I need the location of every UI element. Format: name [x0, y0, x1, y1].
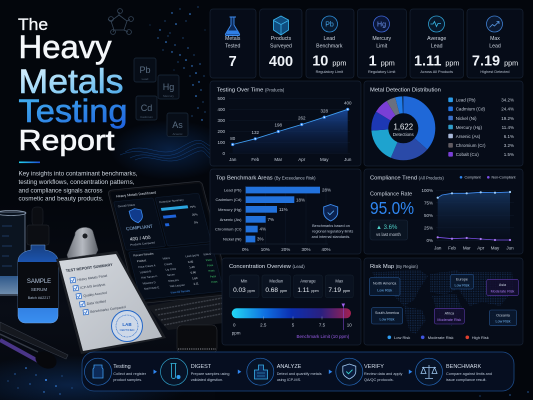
- donut chart: [380, 105, 427, 152]
- recent results table: 1.40: [189, 265, 195, 269]
- note: regional regulatory limits: [312, 230, 353, 234]
- arrow: [409, 370, 412, 374]
- bar chart: 7%: [268, 217, 274, 222]
- legend: [460, 176, 515, 180]
- periodic tiles: [134, 58, 188, 136]
- concentration scale: ppm: [232, 330, 241, 335]
- tweezers and brush: [0, 322, 68, 372]
- region: north america: Low Risk: [377, 288, 392, 292]
- icon: pulse: [428, 16, 444, 32]
- overall status card: [114, 198, 166, 250]
- legend: Arsenic (As): [456, 134, 481, 139]
- stat: median: 0.68 ppm: [265, 287, 287, 294]
- stars: [8, 367, 529, 396]
- checklist: Quality Assured: [83, 291, 107, 298]
- tile: Hg: Mercury: [163, 94, 174, 98]
- concentration scale: 5: [292, 322, 295, 327]
- step: verify: VERIFY: [364, 364, 384, 370]
- concentration scale: 7.5: [319, 322, 326, 327]
- region: north america: North America: [373, 282, 397, 286]
- legend: 24.4%: [501, 106, 514, 112]
- title: Metals: [18, 63, 123, 101]
- checklist: ICP-MS Analysis: [80, 282, 106, 290]
- tile: Hg: [158, 75, 179, 99]
- step: benchmark: issue compliance result.: [446, 378, 487, 382]
- tablet dashboard: [108, 181, 231, 304]
- icon: trend: [486, 16, 502, 32]
- bar chart: 30%: [301, 247, 311, 252]
- stat card: lead benchmark: Lead: [324, 36, 335, 42]
- bar chart: Chromium (Cr): [215, 227, 242, 232]
- stat: average: 1.11 ppm: [297, 287, 319, 294]
- stat: max: 7.19 ppm: [328, 287, 350, 294]
- jar: [177, 325, 217, 353]
- dashboard heading: Heavy Metals Dashboard: [116, 191, 157, 199]
- detection summary card: 20%: [192, 212, 199, 217]
- stat card: lead benchmark: Benchmark: [316, 44, 343, 50]
- tile: As: As: [172, 120, 183, 130]
- recent results table: Nail Lacquer: [169, 283, 185, 288]
- checklist: Benchmarks Compared: [90, 305, 126, 314]
- serum bottle: Batch #A2217: [28, 296, 50, 300]
- title: Testing: [18, 93, 128, 129]
- bar chart: 20%: [281, 247, 290, 252]
- stat card: products surveyed: [260, 9, 302, 78]
- tile: Hg: Hg: [163, 82, 174, 92]
- legend: Lead (Pb): [456, 98, 476, 102]
- checklist: [70, 273, 126, 315]
- recent results table: Mascara D: [142, 280, 156, 285]
- concentration scale: 10: [347, 322, 352, 327]
- recent results table: Lead (ppm): [185, 253, 200, 258]
- line chart: Apr: [298, 157, 306, 162]
- line chart: [217, 96, 352, 162]
- heading: Compliance Trend (All Products): [370, 175, 444, 181]
- line chart: 80: [230, 136, 236, 141]
- region: asia: [487, 279, 518, 296]
- legend: Moderate Risk: [428, 335, 453, 340]
- trend chart: Jan: [434, 245, 442, 250]
- step: analyze: Detect and quantify metals: [277, 372, 322, 376]
- trend chart: Jun: [506, 245, 514, 250]
- step: digest: DIGEST: [191, 364, 212, 370]
- panel: top benchmark areas: [210, 169, 361, 254]
- intro text: cosmetic and beauty products.: [18, 196, 104, 202]
- region: africa: Africa: [445, 312, 455, 316]
- tile: Pb: Pb: [139, 65, 151, 75]
- region: europe: Europe: [456, 278, 468, 282]
- trend chart: [421, 188, 514, 250]
- stat: max: [325, 275, 353, 298]
- concentration scale: Benchmark Limit (10 ppm): [297, 334, 350, 339]
- recent results table: 1.60: [192, 276, 198, 280]
- particle swirl: [150, 6, 206, 121]
- legend: 3.2%: [504, 143, 514, 148]
- panel: compliance trend: [364, 169, 523, 254]
- icon: Pb: Pb: [325, 22, 334, 28]
- stat card: metals tested: 7: [229, 54, 237, 70]
- stat card: max lead: Lead: [489, 44, 501, 50]
- step: benchmark: Compare against limits and: [446, 372, 492, 376]
- world map: [372, 270, 514, 334]
- checklist: Heavy Metals Panel: [77, 274, 108, 282]
- stat card: mercury limit: Mercury: [372, 36, 391, 42]
- legend: Nickel (Ni): [456, 116, 477, 121]
- tile: Cd: [136, 96, 157, 120]
- detection summary card: Detection Summary: [159, 198, 185, 204]
- title: The: [18, 15, 48, 34]
- trend chart: 75%: [424, 200, 433, 205]
- stat card: metals tested: [210, 9, 256, 78]
- concentration scale: 2.5: [260, 322, 267, 327]
- legend: Low Risk: [394, 335, 410, 340]
- stat card: average lead: Lead: [431, 44, 443, 50]
- heading: Concentration Overview (Lead): [229, 264, 305, 270]
- legend: 34.2%: [501, 98, 514, 102]
- trend chart: Feb: [448, 245, 456, 250]
- trend chart: Apr: [477, 245, 485, 250]
- recent results table: Recent Results: [133, 252, 155, 257]
- stat card: average lead: Across All Products: [420, 70, 453, 74]
- stat card: max lead: [467, 9, 523, 78]
- region: asia: Moderate Risk: [491, 290, 515, 294]
- clipboard: [56, 227, 166, 354]
- region: south america: [371, 308, 403, 324]
- stat card: mercury limit: Regulatory Limit: [368, 70, 396, 74]
- line chart: 132: [252, 130, 260, 135]
- region: europe: [451, 274, 473, 289]
- panel: testing over time: [210, 81, 361, 166]
- stat: min: 0.03 ppm: [233, 287, 255, 294]
- recent results table: 0.90: [190, 270, 197, 275]
- stat card: mercury limit: [358, 9, 406, 78]
- tile: Pb: [134, 58, 156, 82]
- line chart: 0: [222, 151, 225, 156]
- line chart: Feb: [251, 157, 260, 162]
- recent results table: [128, 244, 224, 300]
- stat card: products surveyed: 400: [269, 54, 293, 70]
- recent results table: Serum: [166, 272, 176, 277]
- region: oceania: Oceania: [496, 314, 511, 318]
- region: north america: [369, 278, 400, 296]
- line chart: 198: [275, 122, 283, 128]
- stat card: max lead: Max: [490, 36, 500, 42]
- heading: Testing Over Time (Products): [217, 87, 285, 93]
- bar chart: 4%: [260, 227, 266, 232]
- stat card: lead benchmark: 10 ppm: [312, 54, 346, 70]
- bar chart: Arsenic (As): [220, 217, 242, 222]
- serum bottle: SERUM: [31, 287, 47, 292]
- stat card: average lead: Average: [427, 36, 446, 42]
- icon: Hg: Hg: [377, 22, 386, 28]
- panel: concentration overview: [222, 258, 361, 345]
- bar chart: Lead (Pb): [224, 188, 242, 192]
- stat: average: [294, 275, 322, 298]
- legend: Mercury (Hg): [456, 125, 482, 130]
- region: oceania: Low Risk: [496, 320, 511, 324]
- recent results table: Pass: [205, 258, 213, 262]
- intro text: testing workflows, concentration patterns,: [18, 179, 135, 186]
- concentration scale: [232, 304, 352, 339]
- bar chart: 10%: [261, 247, 270, 252]
- intro text: and compliance signals across: [18, 188, 103, 194]
- stat card: products surveyed: Products: [271, 36, 292, 42]
- line chart: 500: [217, 96, 225, 101]
- legend: 11.4%: [502, 125, 514, 130]
- overall status card: 400 / 400: [129, 235, 152, 243]
- report heading: TEST REPORT SUMMARY: [66, 263, 113, 273]
- step: digest: [160, 358, 230, 385]
- trend chart: 100%: [421, 188, 433, 193]
- donut chart: 1,622: [394, 122, 413, 132]
- legend: High Risk: [472, 335, 489, 340]
- stat card: max lead: 7.19 ppm: [472, 54, 518, 70]
- bar chart: 40%: [321, 247, 331, 252]
- line chart: 100: [217, 140, 225, 145]
- trend chart: 0%: [426, 238, 433, 243]
- stamp: CERTIFIED: [120, 328, 134, 332]
- heading: Top Benchmark Areas (By Exceedance Risk): [216, 175, 316, 181]
- stat card: mercury limit: 1 ppm: [369, 54, 395, 70]
- legend: [448, 98, 514, 157]
- bar chart: 11%: [279, 207, 288, 212]
- recent results table: View All Results: [170, 289, 191, 295]
- stat card: max lead: Highest Detected: [480, 70, 510, 74]
- overall status card: Products Compared: [130, 240, 156, 247]
- trend chart: May: [491, 245, 500, 250]
- arrow: [329, 370, 332, 374]
- tile: As: [167, 113, 188, 136]
- stamp: LAB: [122, 322, 132, 327]
- recent results table: Face Cream A: [138, 263, 156, 269]
- stat: average: Average: [300, 278, 316, 283]
- molecule icon: [108, 9, 133, 34]
- bar chart: Nickel (Ni): [223, 237, 242, 242]
- panel: metal detection distribution: [364, 81, 523, 166]
- concentration scale: 0: [233, 322, 236, 327]
- step: testing: [84, 358, 147, 385]
- step: testing: Testing: [113, 364, 131, 370]
- tile: Cd: Cadmium: [140, 115, 153, 119]
- region: africa: Moderate Risk: [437, 318, 461, 322]
- step: benchmark: [416, 358, 492, 385]
- legend: Chromium (Cr): [456, 143, 486, 148]
- icon: flask: [225, 17, 240, 36]
- arrow: [238, 370, 241, 374]
- region: south america: Low Risk: [380, 318, 395, 322]
- trend chart: Mar: [463, 245, 471, 250]
- tile: Pb: Lead: [142, 77, 149, 81]
- recent results table: Cream: [164, 262, 173, 266]
- recent results table: Lipstick B: [139, 269, 152, 274]
- stat: min: Min: [241, 278, 248, 283]
- step: digest: Prepare samples using: [191, 372, 230, 376]
- recent results table: Pass: [208, 268, 216, 273]
- recent results table: Product: [136, 258, 147, 263]
- step: analyze: ANALYZE: [277, 364, 302, 370]
- line chart: May: [320, 157, 329, 162]
- stat card: metals tested: Metals: [225, 36, 241, 42]
- legend: 19.2%: [501, 116, 514, 121]
- legend: Compliant: [464, 176, 481, 180]
- stat card: lead benchmark: [306, 9, 354, 78]
- arrow: [154, 370, 157, 374]
- recent results table: Pass: [211, 279, 218, 284]
- line chart: 262: [298, 116, 306, 120]
- legend: 1.5%: [504, 152, 514, 157]
- serum bottle: [18, 207, 58, 323]
- stat: median: Median: [269, 278, 284, 283]
- beaker: [0, 210, 26, 295]
- detection summary card: 5%: [194, 220, 199, 224]
- stat card: lead benchmark: Regulatory Limit: [316, 70, 344, 74]
- region: south america: South America: [375, 311, 400, 315]
- line chart: 200: [217, 129, 225, 134]
- stat: median: [262, 275, 291, 298]
- recent results table: Lip Color: [165, 267, 177, 272]
- recent results table: Matrix: [162, 256, 171, 261]
- change badge: ▲ 3.6%: [376, 225, 398, 231]
- bar chart: 3%: [257, 237, 264, 242]
- title: Heavy: [18, 29, 112, 65]
- recent results table: Pass: [209, 274, 217, 279]
- bar chart: Cadmium (Cd): [215, 197, 242, 202]
- bar chart: 18%: [296, 197, 305, 202]
- bar chart: Mercury (Hg): [218, 207, 242, 212]
- line chart: Jun: [344, 157, 352, 162]
- recent results table: Pass: [207, 263, 214, 267]
- stamp: [112, 310, 142, 342]
- step: testing: Collect and register: [113, 372, 147, 376]
- intro text: Key insights into contaminant benchmarks,: [18, 170, 138, 178]
- step: testing: product samples.: [113, 378, 142, 382]
- accent line: [19, 162, 40, 163]
- line chart: Mar: [274, 157, 283, 162]
- stat: max: Max: [335, 278, 344, 283]
- line chart: 400: [344, 100, 352, 106]
- panel: compliance trend: 95.0%: [370, 198, 414, 218]
- recent results table: 0.45: [187, 259, 194, 264]
- note: [312, 224, 353, 239]
- stat card: products surveyed: Surveyed: [270, 44, 292, 50]
- region: africa: [434, 308, 464, 324]
- detection summary card: [155, 193, 211, 246]
- recent results table: Mascara: [168, 278, 180, 283]
- stat: min: [229, 275, 259, 298]
- step: verify: Review data and apply: [364, 372, 403, 376]
- stat card: average lead: [410, 9, 464, 78]
- heading: Risk Map (By Region): [370, 264, 418, 270]
- step: benchmark: BENCHMARK: [446, 364, 481, 370]
- legend: [388, 335, 489, 340]
- line chart: 400: [217, 107, 225, 112]
- step: verify: [336, 358, 403, 385]
- serum bottle: SAMPLE: [27, 279, 51, 285]
- change badge: [370, 220, 408, 240]
- compliance rate: Compliance Rate: [370, 191, 412, 197]
- recent results table: Nail Polish E: [144, 285, 160, 291]
- change badge: vs last month: [376, 232, 402, 237]
- step: digest: validated digestion.: [191, 378, 223, 382]
- clip: [67, 227, 98, 258]
- heading: Metal Detection Distribution: [370, 87, 441, 93]
- icon: shield: [324, 204, 338, 221]
- process bar: [82, 352, 514, 391]
- line chart: 328: [321, 108, 329, 114]
- icon: cube: [274, 16, 288, 35]
- step: analyze: using ICP-MS.: [277, 378, 301, 382]
- legend: 6.1%: [504, 134, 514, 139]
- tile: As: Arsenic: [172, 132, 183, 136]
- recent results table: Status: [203, 252, 212, 256]
- line chart: Jan: [229, 157, 237, 162]
- panel: risk map: [364, 258, 523, 345]
- tablet keyboard: [147, 292, 232, 330]
- donut chart: Detections: [393, 132, 414, 137]
- step: analyze: [247, 358, 322, 385]
- detection summary card: 70%: [190, 204, 197, 209]
- step: verify: QA/QC protocols.: [364, 378, 394, 382]
- stat card: mercury limit: Limit: [376, 44, 388, 50]
- wave lines: [120, 140, 210, 161]
- intro text: [18, 170, 138, 202]
- note: Benchmarks based on: [312, 224, 350, 228]
- region: oceania: [489, 310, 517, 326]
- trend chart: 50%: [424, 213, 433, 218]
- title: Report: [18, 125, 114, 157]
- stat card: average lead: 1.11 ppm: [414, 54, 459, 70]
- bar chart: 0%: [242, 247, 249, 252]
- legend: Cobalt (Co): [456, 152, 479, 157]
- checklist: Data Verified: [87, 299, 106, 306]
- note: and internal standards.: [312, 235, 350, 239]
- overall status card: Overall Status: [117, 203, 136, 208]
- legend: Cadmium (Cd): [456, 106, 485, 112]
- bar chart: 28%: [322, 188, 331, 193]
- overall status card: COMPLIANT: [126, 224, 153, 231]
- region: europe: Low Risk: [455, 284, 470, 288]
- trend chart: 25%: [424, 225, 433, 230]
- stat card: metals tested: Tested: [225, 44, 240, 50]
- title: [18, 15, 128, 157]
- line chart: 300: [217, 118, 225, 123]
- tile: Cd: Cd: [141, 103, 152, 113]
- recent results table: Hair Serum C: [141, 274, 158, 280]
- region: asia: Asia: [499, 283, 507, 287]
- bar chart: [215, 186, 331, 252]
- recent results table: 2.11: [193, 281, 200, 286]
- legend: Non-Compliant: [492, 176, 515, 180]
